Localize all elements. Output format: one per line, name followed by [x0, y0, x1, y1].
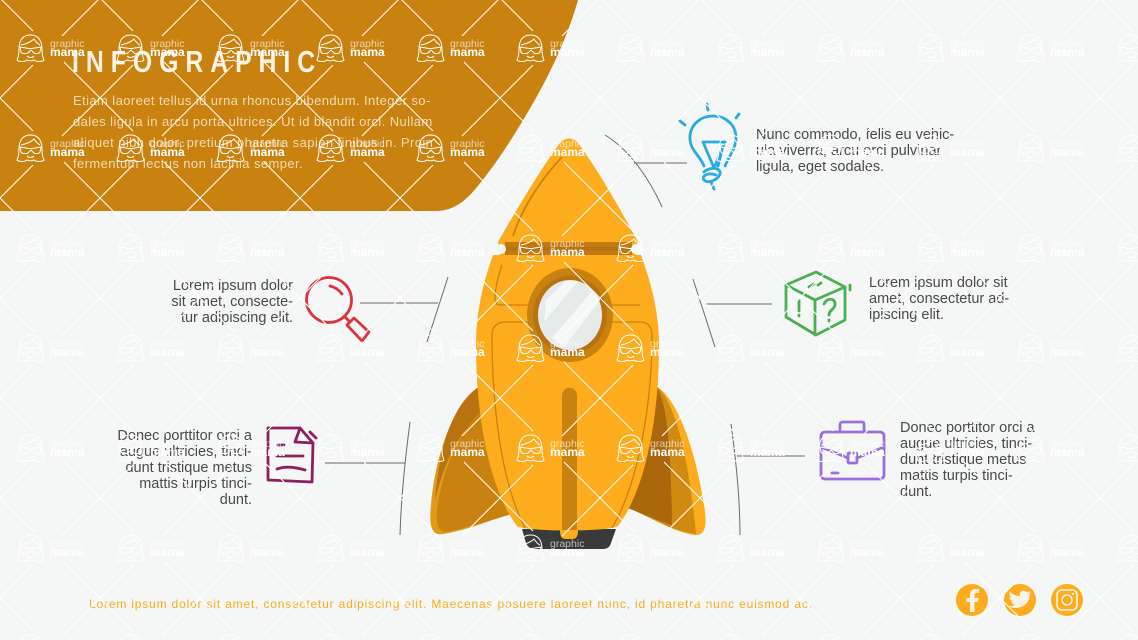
- hull detail lines: [492, 157, 652, 528]
- connector: document: [325, 422, 410, 535]
- text: briefcase: dunt.: [900, 484, 932, 500]
- collar band: [505, 242, 632, 255]
- porthole: [527, 268, 613, 362]
- centre fin bar: [562, 388, 577, 532]
- title: INFOGRAPHIC: [72, 44, 315, 79]
- left fin: [430, 386, 515, 534]
- text: cube: [869, 275, 1009, 323]
- icon: briefcase: [821, 422, 884, 479]
- engine nozzle: [522, 529, 616, 549]
- right fin: [625, 386, 706, 535]
- text: document: dunt.: [220, 492, 252, 508]
- text: cube: amet, consectetur ad-: [869, 291, 1009, 307]
- icon: mystery cube: [786, 272, 850, 335]
- text: magnifier: sit amet, consecte-: [171, 294, 293, 310]
- intro paragraph: fermentum lectus non lacinia semper.: [73, 156, 303, 171]
- text: magnifier: Lorem ipsum dolor: [173, 278, 293, 294]
- icon: document: [268, 428, 316, 482]
- text: briefcase: Donec porttitor orci a: [900, 420, 1036, 436]
- icon: magnifier: [306, 278, 369, 341]
- text: document: dunt tristique metus: [125, 460, 252, 476]
- text: bulb: Nunc commodo, felis eu vehic-: [756, 127, 954, 143]
- intro paragraph: [73, 93, 433, 171]
- intro paragraph: dales ligula in arcu porta ultrices. Ut id blandit orci. Nullam: [73, 114, 433, 129]
- text: briefcase: mattis turpis tinci-: [900, 468, 1013, 484]
- header banner: [0, 0, 578, 211]
- connector: cube: [693, 279, 772, 347]
- intro paragraph: Etiam laoreet tellus id urna rhoncus bibendum. Integer so-: [73, 93, 431, 108]
- footer text: Lorem ipsum dolor sit amet, consectetur adipiscing elit. Maecenas posuere laoreet nunc, id pharetra nunc euismod ac.: [89, 597, 812, 611]
- text: bulb: ligula, eget sodales.: [756, 159, 884, 175]
- text: document: augue ultricies, tinci-: [120, 444, 252, 460]
- icon: facebook: [956, 584, 988, 616]
- connector: briefcase: [731, 424, 805, 535]
- text: briefcase: dunt tristique metus: [900, 452, 1027, 468]
- text: briefcase: [900, 420, 1036, 500]
- text: briefcase: augue ultricies, tinci-: [900, 436, 1032, 452]
- text: cube: Lorem ipsum dolor sit: [869, 275, 1008, 291]
- text: cube: ipiscing elit.: [869, 307, 944, 323]
- text: document: [117, 428, 253, 508]
- intro paragraph: aliquet nibh dolor, pretium pharetra sapien finibus in. Proin: [73, 135, 433, 150]
- rocket body: [476, 255, 659, 530]
- text: document: Donec porttitor orci a: [117, 428, 253, 444]
- text: magnifier: [171, 278, 293, 326]
- icon: twitter: [1004, 584, 1036, 616]
- connector: bulb: [605, 135, 687, 207]
- rocket illustration: [430, 138, 706, 549]
- icon: light bulb: [680, 104, 739, 189]
- connector: magnifier: [360, 277, 448, 342]
- rocket nose cone: [498, 138, 638, 255]
- text: magnifier: tur adipiscing elit.: [181, 310, 293, 326]
- text: bulb: ula viverra, arcu orci pulvinar: [756, 143, 942, 159]
- text: bulb: [756, 127, 954, 175]
- text: document: mattis turpis tinci-: [139, 476, 252, 492]
- icon: instagram: [1051, 584, 1083, 616]
